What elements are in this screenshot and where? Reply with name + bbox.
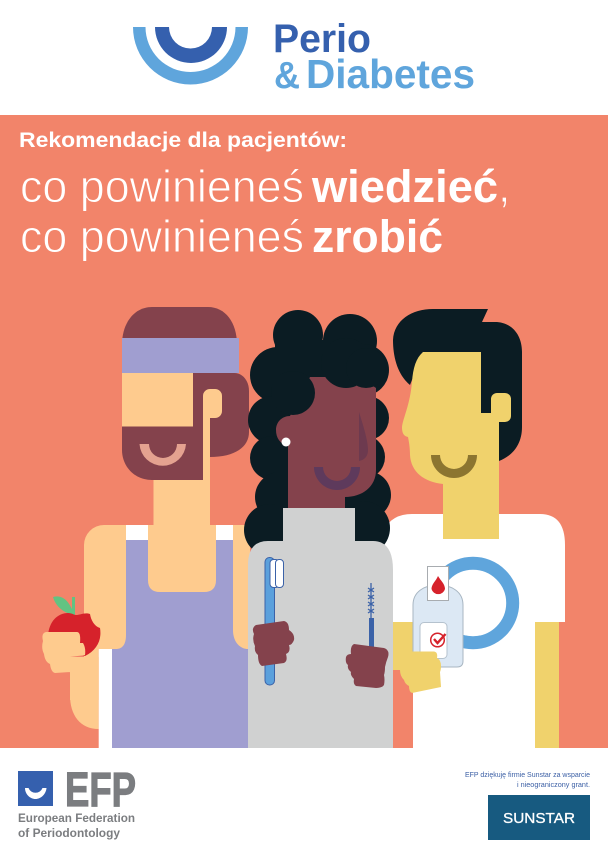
- icon: check mark: [431, 633, 446, 647]
- coral background panel: [0, 115, 608, 748]
- hair and beard: [122, 307, 237, 373]
- apple: [48, 596, 100, 656]
- blood label: [428, 566, 448, 600]
- person: man with glucose meter: [384, 309, 565, 748]
- neck: [443, 480, 499, 539]
- sponsor note: EFP dziękuję firmie Sunstar za wsparcie: [465, 772, 590, 779]
- glucose meter bottle: [413, 566, 463, 667]
- meter screen: [420, 622, 447, 658]
- hand holding toothbrush: [253, 621, 294, 666]
- organisation name: [18, 811, 135, 840]
- heading: [19, 129, 511, 262]
- tank top: [112, 540, 248, 748]
- title line 2: zrobić: [312, 211, 443, 262]
- blue ring: [433, 563, 513, 643]
- toothbrush: [265, 558, 284, 685]
- hand holding apple: [42, 632, 99, 700]
- icon: logo arcs: [133, 27, 248, 84]
- smile: [431, 455, 477, 478]
- left arm: [384, 622, 413, 670]
- logo text: &: [274, 55, 300, 97]
- ear and neck strip: [203, 389, 222, 480]
- right arm: [535, 622, 559, 748]
- hair: [393, 309, 522, 461]
- logo text: Perio: [273, 17, 371, 61]
- title line 1: wiedzieć: [311, 161, 498, 212]
- collar and body: [248, 508, 393, 748]
- title line 1: ,: [498, 161, 511, 212]
- organisation name: European Federation: [18, 811, 135, 825]
- face: [402, 352, 499, 484]
- face and neck: [276, 377, 376, 508]
- hair fringe: [271, 338, 386, 415]
- logo: Perio & Diabetes: [133, 17, 475, 97]
- EFP letters: EFP: [65, 764, 136, 817]
- title line 2: co powinieneś: [20, 211, 304, 262]
- nose shadow: [359, 412, 368, 461]
- white undershirt strip: [99, 649, 113, 748]
- t-shirt: [384, 514, 565, 748]
- ear: [491, 393, 511, 422]
- icon: EFP square: [18, 771, 53, 806]
- face: [122, 373, 193, 426]
- sponsor note: i nieograniczony grant.: [517, 782, 590, 789]
- hand holding interdental brush: [346, 644, 388, 688]
- hand holding meter: [393, 652, 441, 693]
- title line 1: co powinieneś: [20, 161, 304, 212]
- coral gap beside arm: [384, 670, 413, 748]
- sunstar logo: [488, 795, 590, 840]
- headband: [122, 338, 239, 373]
- smile: [314, 467, 360, 490]
- earring: [282, 438, 290, 446]
- neck and chest: [148, 475, 216, 592]
- logo text: [273, 17, 475, 97]
- sunstar logo: SUNSTAR: [503, 810, 575, 827]
- person: man with headband and apple: [42, 307, 250, 748]
- organisation name: of Periodontology: [18, 826, 120, 840]
- icon: blood drop: [432, 576, 445, 594]
- interdental brush: [368, 583, 374, 648]
- curly hair: [244, 310, 391, 556]
- body skin: [70, 525, 250, 729]
- footer logo: EFP: [18, 764, 136, 840]
- tank straps: [126, 525, 233, 540]
- sponsor note: [465, 772, 590, 789]
- logo text: Diabetes: [306, 51, 475, 97]
- person: woman with toothbrush: [244, 310, 393, 748]
- smile: [140, 444, 186, 466]
- subtitle: Rekomendacje dla pacjentów:: [19, 129, 347, 152]
